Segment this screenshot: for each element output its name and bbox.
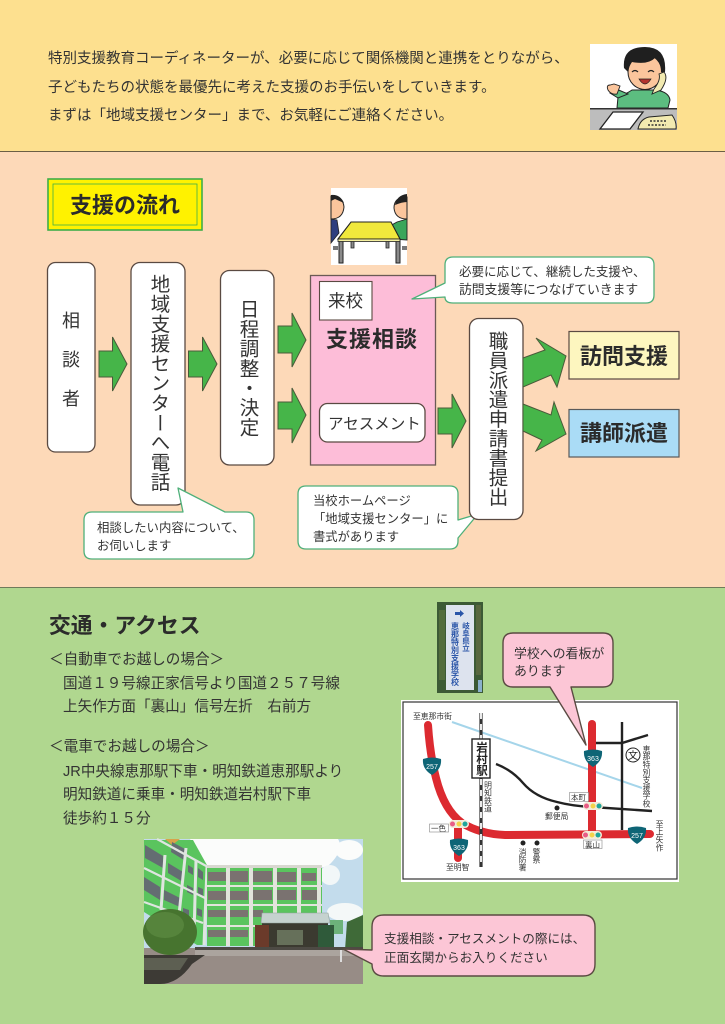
box: assessment — [320, 404, 425, 442]
box: call the center — [131, 262, 185, 505]
map — [401, 700, 679, 882]
map: labels: 至明智 — [446, 862, 469, 872]
arrow — [188, 337, 217, 391]
callout: website — [298, 486, 478, 549]
map: labels: 恵那特別支援学校 — [642, 744, 651, 808]
arrow — [278, 313, 306, 367]
map: labels: 消防署 — [518, 847, 527, 872]
photo: school sign — [437, 602, 483, 693]
callout: website: 「地域支援センター」に — [313, 512, 448, 526]
left wing — [144, 840, 208, 945]
map: railway — [479, 713, 483, 867]
box: submit application: 職員派遣申請書提出 — [485, 331, 508, 506]
photo: school building — [143, 839, 363, 984]
heading: support flow: 支援の流れ — [70, 193, 180, 218]
callout: website: 当校ホームページ — [313, 494, 411, 508]
text: by train: ＜電車でお越しの場合＞ — [49, 738, 210, 755]
photo: school sign: 恵那特別支援学校 — [450, 621, 460, 687]
bush — [143, 909, 197, 955]
text: by train: 明知鉄道に乗車・明知鉄道岩村駅下車 — [63, 786, 311, 803]
ground — [144, 948, 363, 984]
map: labels — [413, 711, 664, 872]
intro text: 子どもたちの状態を最優先に考えた支援のお手伝いをしていきます。 — [48, 79, 496, 96]
heading: support consultation: 支援相談 — [326, 327, 418, 352]
box: visit support — [569, 332, 679, 379]
callout: main entrance — [343, 915, 595, 976]
intro text — [48, 49, 569, 124]
panel: access — [0, 588, 725, 1024]
map: Iwamura station: 岩村駅 — [475, 741, 488, 777]
map: route shields: 363 — [587, 756, 599, 763]
entrance — [262, 923, 328, 947]
panel: support consultation — [310, 276, 436, 465]
map: traffic signals — [449, 802, 603, 839]
callout: ask content: 相談したい内容について、 — [97, 521, 245, 535]
box: consultant: 者 — [62, 389, 80, 409]
icon: person on phone — [590, 44, 677, 130]
box: school visit: 来校 — [328, 291, 363, 311]
text: by train: JR中央線恵那駅下車・明知鉄道恵那駅より — [63, 763, 343, 780]
callout: sign: 学校への看板が — [514, 646, 604, 661]
arrow — [99, 337, 127, 391]
map: labels: 一色 — [431, 823, 446, 833]
text: by train: 徒歩約１５分 — [63, 810, 151, 827]
arrow: to visit support — [523, 338, 566, 387]
map: black roads — [496, 722, 652, 830]
callout: website: 書式があります — [313, 529, 399, 544]
map: red roads — [428, 724, 650, 858]
map: route shields: 363 — [453, 845, 465, 852]
map: landmarks: 文 — [628, 749, 638, 762]
box: lecturer dispatch: 講師派遣 — [580, 421, 668, 446]
icon: table meeting — [331, 188, 407, 265]
box: consultant: 談 — [62, 350, 80, 370]
main block — [207, 866, 322, 946]
intro text: 特別支援教育コーディネーターが、必要に応じて関係機関と連携をとりながら、 — [48, 49, 569, 67]
panel: support flow — [0, 152, 725, 588]
text: by car — [49, 651, 340, 715]
callout: main entrance: 支援相談・アセスメントの際には、 — [384, 932, 585, 946]
text: by car: 国道１９号線正家信号より国道２５７号線 — [63, 675, 340, 692]
text: by train — [49, 738, 343, 827]
box: consultant: 相 — [62, 311, 80, 331]
callout: sign — [503, 633, 613, 745]
arrow: to lecturer dispatch — [523, 402, 566, 451]
box: visit support: 訪問支援 — [580, 344, 668, 369]
map: route shields: 257 — [426, 764, 438, 771]
box: call the center: 地域支援センターへ電話 — [147, 274, 170, 492]
box: school visit — [320, 282, 372, 320]
box: submit application — [470, 318, 523, 520]
map: labels: 明知鉄道 — [483, 781, 492, 813]
map: landmarks — [520, 748, 640, 846]
map: labels: 至恵那市街 — [413, 711, 452, 721]
arrow — [278, 388, 306, 443]
map: river line — [452, 722, 642, 788]
box: lecturer dispatch — [569, 410, 679, 457]
box: consultant — [48, 262, 95, 452]
map: labels: 至上矢作 — [655, 820, 664, 852]
map: labels: 警察 — [532, 847, 541, 865]
callout: ask content — [84, 488, 254, 559]
intro text: まずは「地域支援センター」まで、お気軽にご連絡ください。 — [48, 107, 453, 124]
heading: support flow — [48, 179, 202, 230]
callout: continued support: 訪問支援等につなげていきます — [459, 282, 638, 297]
photo: school sign: 岐阜県立 — [461, 621, 470, 652]
text: by car: 上矢作方面「裏山」信号左折 右前方 — [63, 698, 311, 715]
callout: sign: あります — [514, 664, 566, 678]
box: assessment: アセスメント — [328, 416, 421, 433]
map: labels: 本町 — [571, 792, 586, 802]
map: route shields — [423, 750, 646, 856]
arrow — [438, 394, 466, 448]
callout: main entrance: 正面玄関からお入りください — [384, 951, 548, 965]
box: schedule — [220, 270, 274, 465]
map: route shields: 257 — [631, 833, 643, 840]
heading: access: 交通・アクセス — [49, 613, 200, 638]
text: by car: ＜自動車でお越しの場合＞ — [49, 651, 224, 668]
box: schedule: 日程調整・決定 — [236, 299, 259, 437]
map: labels: 郵便局 — [545, 811, 569, 821]
map: labels: 裏山 — [585, 840, 600, 850]
panel: intro — [0, 0, 725, 152]
callout: ask content: お伺いします — [97, 539, 171, 553]
map: Iwamura station — [472, 739, 490, 778]
callout: continued support: 必要に応じて、継続した支援や、 — [459, 265, 646, 279]
callout: continued support — [412, 257, 654, 303]
